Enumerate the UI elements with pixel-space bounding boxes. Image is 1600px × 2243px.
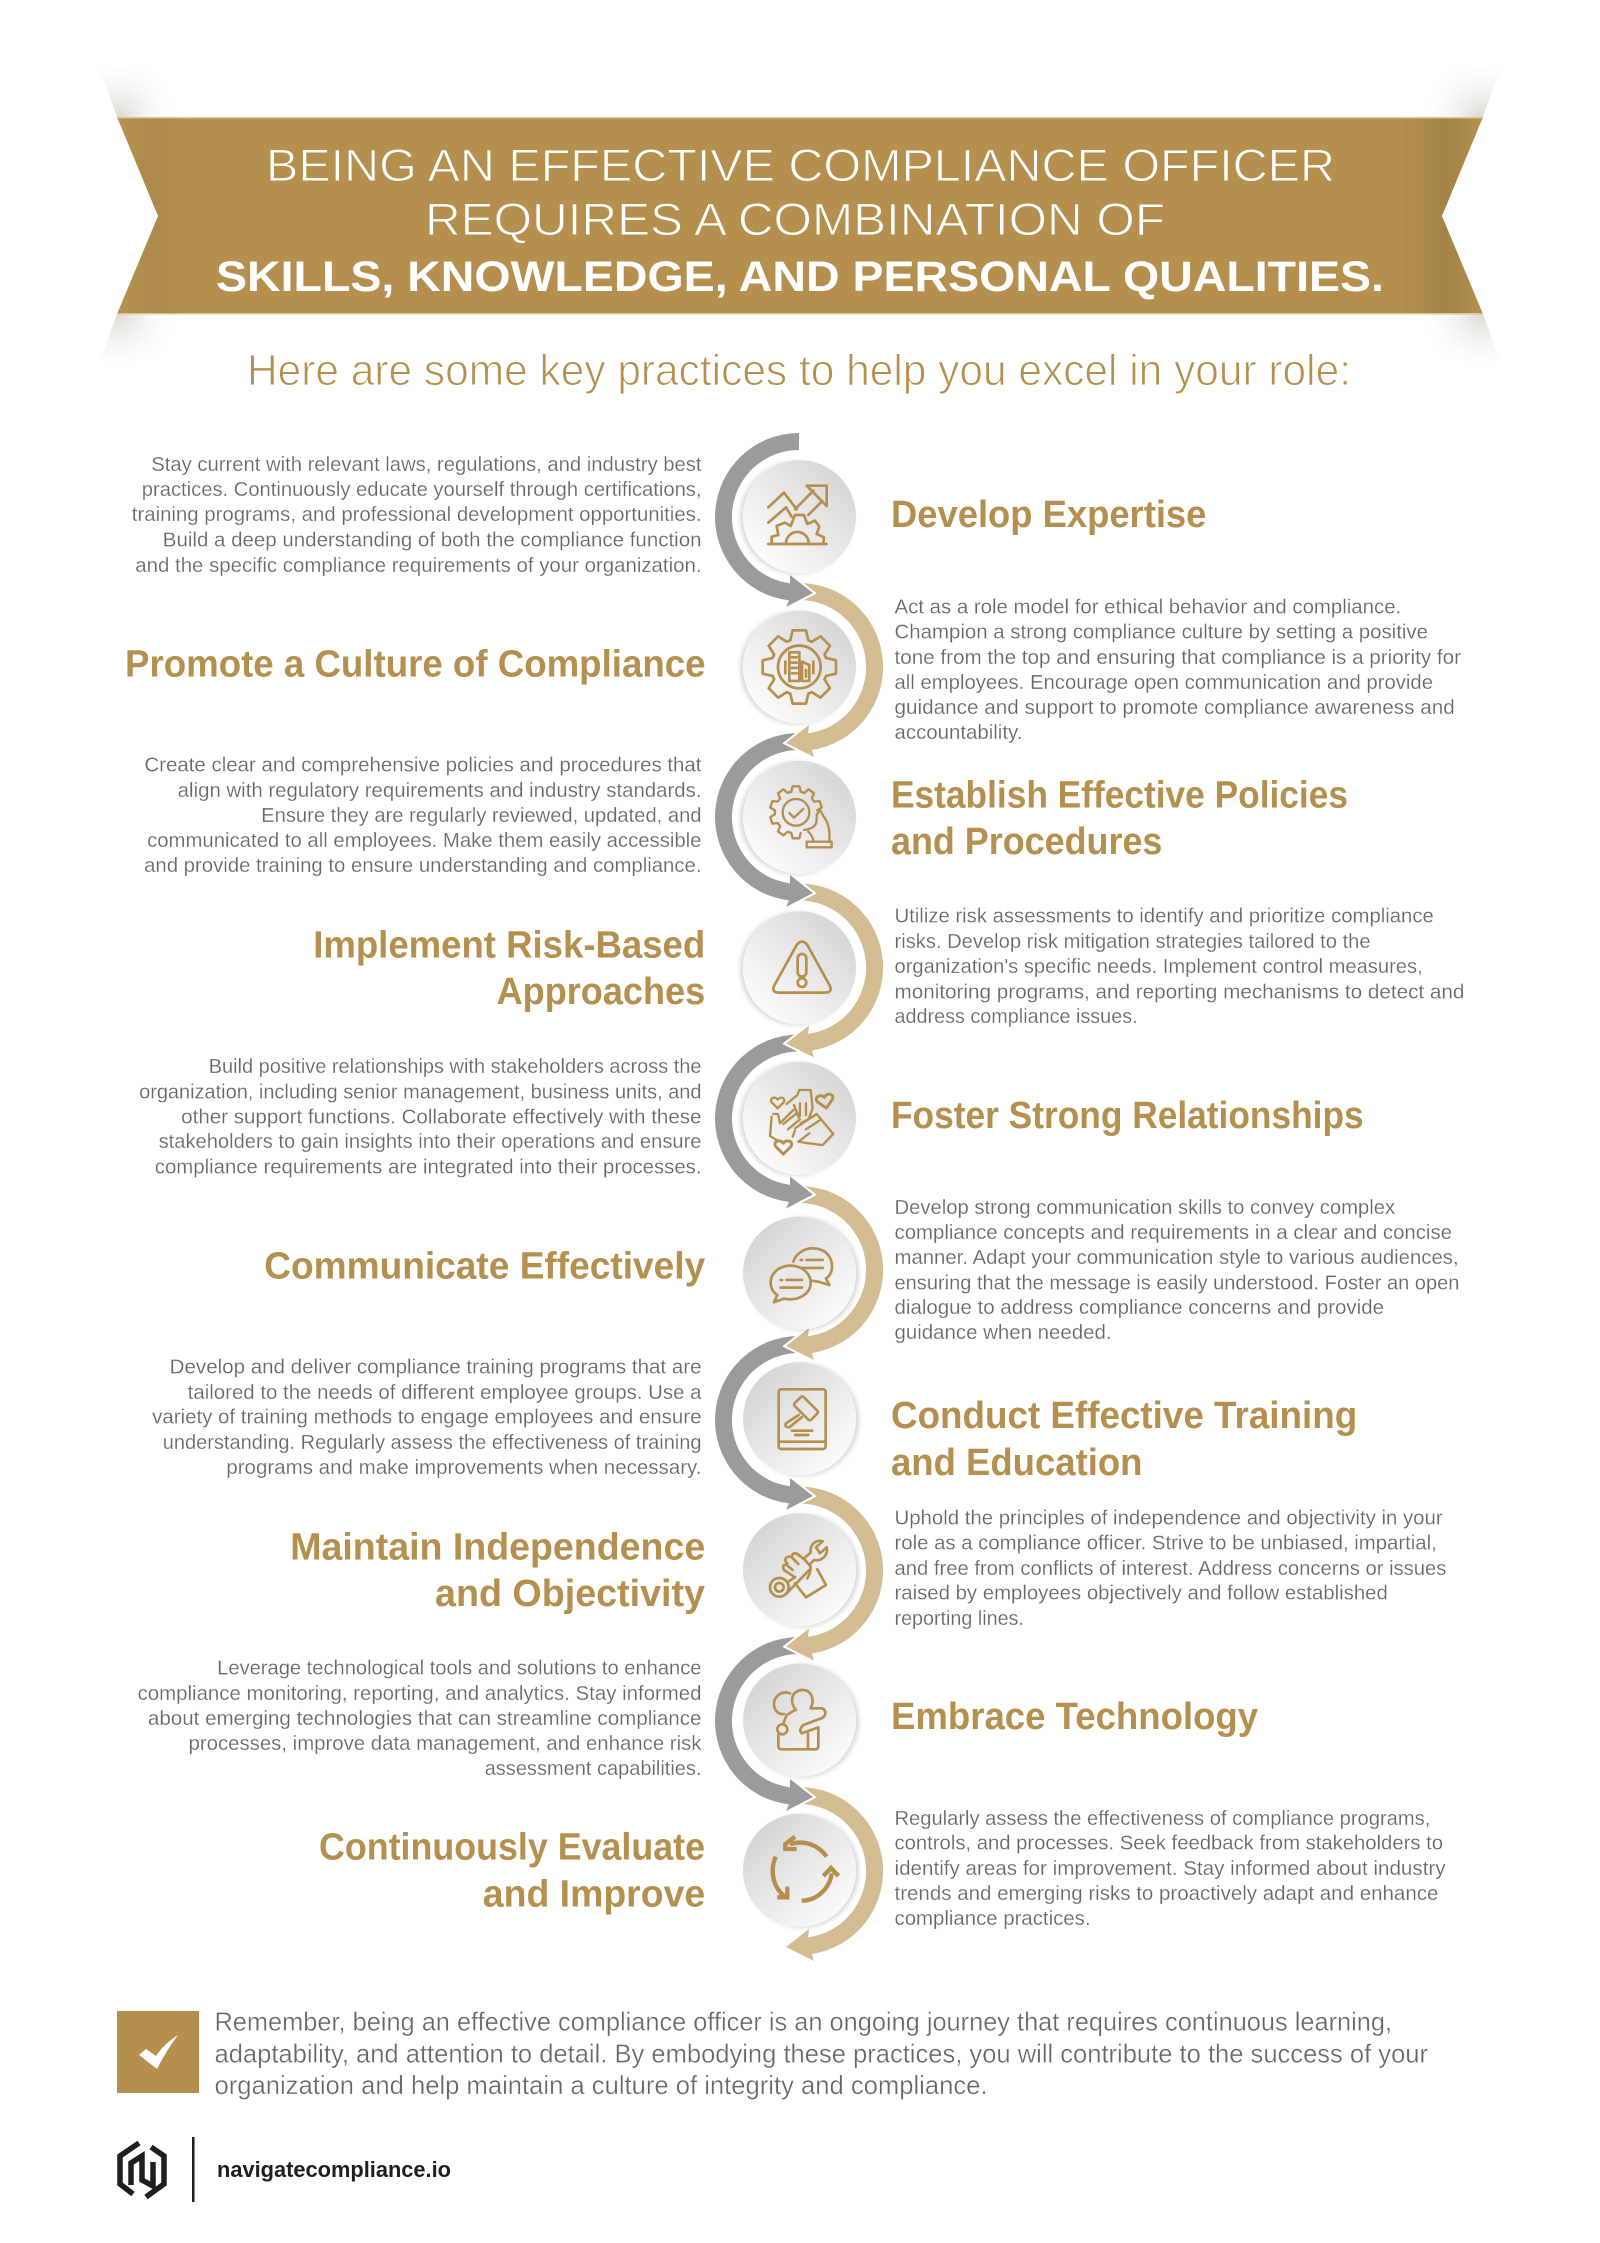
arrow: grey 1 [715, 433, 813, 607]
subtitle: Here are some key practices to help you excel in your role: [247, 346, 1351, 395]
text block: communicate: ensuring that the message is easily understood. Foster an open [894, 1272, 1459, 1294]
arrow: grey 3 [715, 1034, 813, 1208]
text block: communicate: manner. Adapt your communication style to various audiences, [894, 1247, 1459, 1269]
circle: communicate [743, 1216, 856, 1330]
text block: improve: controls, and processes. Seek feedback from stakeholders to [894, 1833, 1443, 1855]
text block: technology: assessment capabilities. [485, 1758, 702, 1780]
heading: Promote a Culture of Compliance: Promote a Culture of Compliance [125, 644, 706, 686]
text block: improve: identify areas for improvement. Stay informed about industry [894, 1858, 1446, 1880]
text block: culture [894, 596, 1461, 744]
arrow: tan 3 [786, 1186, 883, 1360]
text block: policies: communicated to all employees. Make them easily accessible [147, 830, 702, 852]
text block: improve: Regularly assess the effectiveness of compliance programs, [894, 1808, 1430, 1830]
panel: Foster Strong Relationships [139, 1056, 1364, 1179]
panel: Establish Effective Policies and Procedures [144, 755, 1348, 877]
circle: technology [743, 1664, 856, 1776]
arrow: tan 4 [786, 1486, 883, 1660]
heading: Implement Risk-Based Approaches: Implement Risk-Based [313, 925, 705, 967]
title: REQUIRES A COMBINATION OF [425, 194, 1165, 245]
text block: training: variety of training methods to engage employees and ensure [152, 1407, 702, 1429]
text block: culture: tone from the top and ensuring that compliance is a priority for [894, 647, 1461, 669]
heading: Continuously Evaluate and Improve: Continuously Evaluate [319, 1827, 705, 1869]
text block: objectivity: reporting lines. [894, 1608, 1024, 1630]
text block: communicate: dialogue to address compliance concerns and provide [894, 1297, 1384, 1319]
icon: joined hands and hearts [770, 1090, 834, 1154]
circle: policies [743, 761, 856, 874]
text block: technology [138, 1658, 703, 1780]
icon: gear with building [763, 630, 836, 704]
text block: communicate: Develop strong communication skills to convey complex [894, 1197, 1395, 1219]
footer website: navigatecompliance.io [217, 2157, 451, 2182]
title: SKILLS, KNOWLEDGE, AND PERSONAL QUALITIES. [216, 253, 1384, 301]
text block: improve: compliance practices. [894, 1908, 1090, 1930]
text block: objectivity: role as a compliance officer. Strive to be unbiased, impartial, [894, 1533, 1437, 1555]
arrow: grey 2 [715, 733, 813, 907]
text block: relationships: other support functions. Collaborate effectively with these [181, 1107, 701, 1129]
banner with folded corners [100, 70, 1500, 361]
text block: technology: Leverage technological tools and solutions to enhance [217, 1658, 701, 1680]
closing note: adaptability, and attention to detail. By embodying these practices, you will contribute to the success of your [214, 2038, 1428, 2068]
arrow: tan 2 [786, 884, 883, 1058]
text block: culture: all employees. Encourage open communication and provide [894, 672, 1433, 694]
heading: Maintain Independence and Objectivity [290, 1527, 705, 1615]
text block: expertise: and the specific compliance requirements of your organization. [135, 555, 702, 577]
text block: technology: processes, improve data management, and enhance risk [188, 1733, 703, 1755]
text block: improve [894, 1808, 1446, 1930]
icon: embracing figures [774, 1690, 825, 1749]
text block: expertise: Build a deep understanding of both the compliance function [163, 530, 702, 552]
icon: hand holding wrench [770, 1541, 827, 1597]
text block: technology: about emerging technologies that can streamline compliance [148, 1708, 701, 1730]
icon: cycle arrows [773, 1837, 838, 1901]
heading: Continuously Evaluate and Improve: and Improve [483, 1874, 705, 1916]
text block: relationships: Build positive relationships with stakeholders across the [209, 1056, 701, 1078]
text block: relationships [139, 1056, 702, 1179]
text block: improve: trends and emerging risks to proactively adapt and enhance [894, 1883, 1438, 1905]
heading: Embrace Technology: Embrace Technology [891, 1696, 1258, 1738]
circle: improve [743, 1814, 856, 1927]
text block: risk: risks. Develop risk mitigation strategies tailored to the [894, 931, 1371, 953]
circle: relationships [743, 1062, 856, 1175]
text block: expertise: Stay current with relevant laws, regulations, and industry best [151, 454, 702, 476]
icon: growth gear [768, 486, 827, 544]
title: BEING AN EFFECTIVE COMPLIANCE OFFICER [266, 140, 1335, 191]
text block: policies: align with regulatory requirements and industry standards. [178, 780, 701, 802]
icon: chat bubbles [771, 1248, 832, 1302]
text block: culture: guidance and support to promote compliance awareness and [894, 697, 1455, 719]
panel: Conduct Effective Training and Education [152, 1357, 1357, 1484]
text block: risk: monitoring programs, and reporting mechanisms to detect and [894, 981, 1464, 1003]
text block: objectivity [894, 1508, 1446, 1630]
text block: relationships: stakeholders to gain insights into their operations and ensure [159, 1131, 702, 1153]
heading: Foster Strong Relationships: Foster Strong Relationships [891, 1095, 1364, 1137]
heading: Develop Expertise: Develop Expertise [891, 494, 1206, 536]
heading: Communicate Effectively: Communicate Effectively [264, 1246, 705, 1288]
circle: training [743, 1362, 856, 1475]
circle: culture [743, 610, 856, 724]
text block: expertise [132, 454, 702, 577]
circle: risk [743, 911, 856, 1024]
text block: expertise: training programs, and professional development opportunities. [132, 504, 702, 526]
heading: Establish Effective Policies and Procedures: Establish Effective Policies [891, 775, 1348, 817]
footer divider [192, 2137, 194, 2202]
heading: Conduct Effective Training and Education: Conduct Effective Training [891, 1395, 1357, 1437]
text block: risk: Utilize risk assessments to identify and prioritize compliance [894, 906, 1434, 928]
text block: policies [144, 755, 702, 877]
logo [120, 2143, 164, 2197]
heading: Implement Risk-Based Approaches: Approaches [497, 971, 705, 1013]
icon: gavel on book [779, 1389, 826, 1449]
panel: Maintain Independence and Objectivity [290, 1508, 1446, 1630]
text block: communicate: compliance concepts and requirements in a clear and concise [894, 1222, 1452, 1244]
text block: relationships: organization, including senior management, business units, and [139, 1081, 702, 1103]
heading: Continuously Evaluate and Improve [319, 1827, 705, 1916]
text block: objectivity: raised by employees objectively and follow established [894, 1583, 1388, 1605]
icon: gear with check and hand [769, 786, 832, 847]
arrow: grey 5 [715, 1637, 813, 1811]
circle: expertise [743, 460, 856, 573]
text block: training: programs and make improvements when necessary. [226, 1457, 702, 1479]
panel: Embrace Technology [138, 1658, 1258, 1780]
text block: culture: accountability. [894, 722, 1022, 744]
text block: risk [894, 906, 1464, 1028]
icon: warning triangle [773, 942, 831, 993]
panel: Implement Risk-Based Approaches [313, 906, 1464, 1028]
text block: objectivity: and free from conflicts of interest. Address concerns or issues [894, 1558, 1446, 1580]
text block: training: understanding. Regularly assess the effectiveness of training [163, 1432, 702, 1454]
text block: objectivity: Uphold the principles of independence and objectivity in your [894, 1508, 1443, 1530]
arrow: grey 4 [715, 1336, 813, 1510]
heading: Maintain Independence and Objectivity: and Objectivity [435, 1573, 705, 1615]
panel: Continuously Evaluate and Improve [319, 1808, 1446, 1930]
panel: Communicate Effectively [264, 1197, 1459, 1344]
icon: check square [117, 2011, 199, 2093]
closing note: organization and help maintain a culture of integrity and compliance. [214, 2070, 988, 2100]
text block: relationships: compliance requirements are integrated into their processes. [155, 1157, 702, 1179]
closing note: Remember, being an effective compliance officer is an ongoing journey that requires continuous learning, [214, 2007, 1392, 2037]
text block: training: Develop and deliver compliance training programs that are [170, 1357, 701, 1379]
heading: Conduct Effective Training and Education: and Education [891, 1442, 1142, 1484]
circle: objectivity [743, 1513, 856, 1626]
heading: Implement Risk-Based Approaches [313, 925, 705, 1013]
text block: risk: organization's specific needs. Implement control measures, [894, 956, 1423, 978]
panel: Develop Expertise [132, 454, 1206, 577]
text block: technology: compliance monitoring, reporting, and analytics. Stay informed [138, 1683, 702, 1705]
text block: culture: Champion a strong compliance culture by setting a positive [894, 622, 1428, 644]
text block: communicate: guidance when needed. [894, 1322, 1112, 1344]
text block: training [152, 1357, 702, 1479]
heading: Establish Effective Policies and Procedures [891, 775, 1348, 863]
text block: policies: Create clear and comprehensive policies and procedures that [144, 755, 702, 777]
heading: Maintain Independence and Objectivity: Maintain Independence [290, 1527, 705, 1569]
heading: Establish Effective Policies and Procedures: and Procedures [891, 821, 1162, 863]
arrow: tan 5 [786, 1787, 883, 1961]
text block: risk: address compliance issues. [894, 1006, 1138, 1028]
title [216, 140, 1384, 301]
heading: Conduct Effective Training and Education [891, 1395, 1357, 1484]
text block: policies: and provide training to ensure understanding and compliance. [144, 855, 702, 877]
closing note [214, 2007, 1428, 2100]
text block: expertise: practices. Continuously educate yourself through certifications, [142, 479, 702, 501]
text block: training: tailored to the needs of different employee groups. Use a [188, 1382, 702, 1404]
panel: Promote a Culture of Compliance [125, 596, 1461, 744]
text block: culture: Act as a role model for ethical behavior and compliance. [894, 596, 1401, 618]
text block: policies: Ensure they are regularly reviewed, updated, and [261, 805, 702, 827]
arrow: tan 1 [786, 583, 883, 757]
text block: communicate [894, 1197, 1459, 1344]
